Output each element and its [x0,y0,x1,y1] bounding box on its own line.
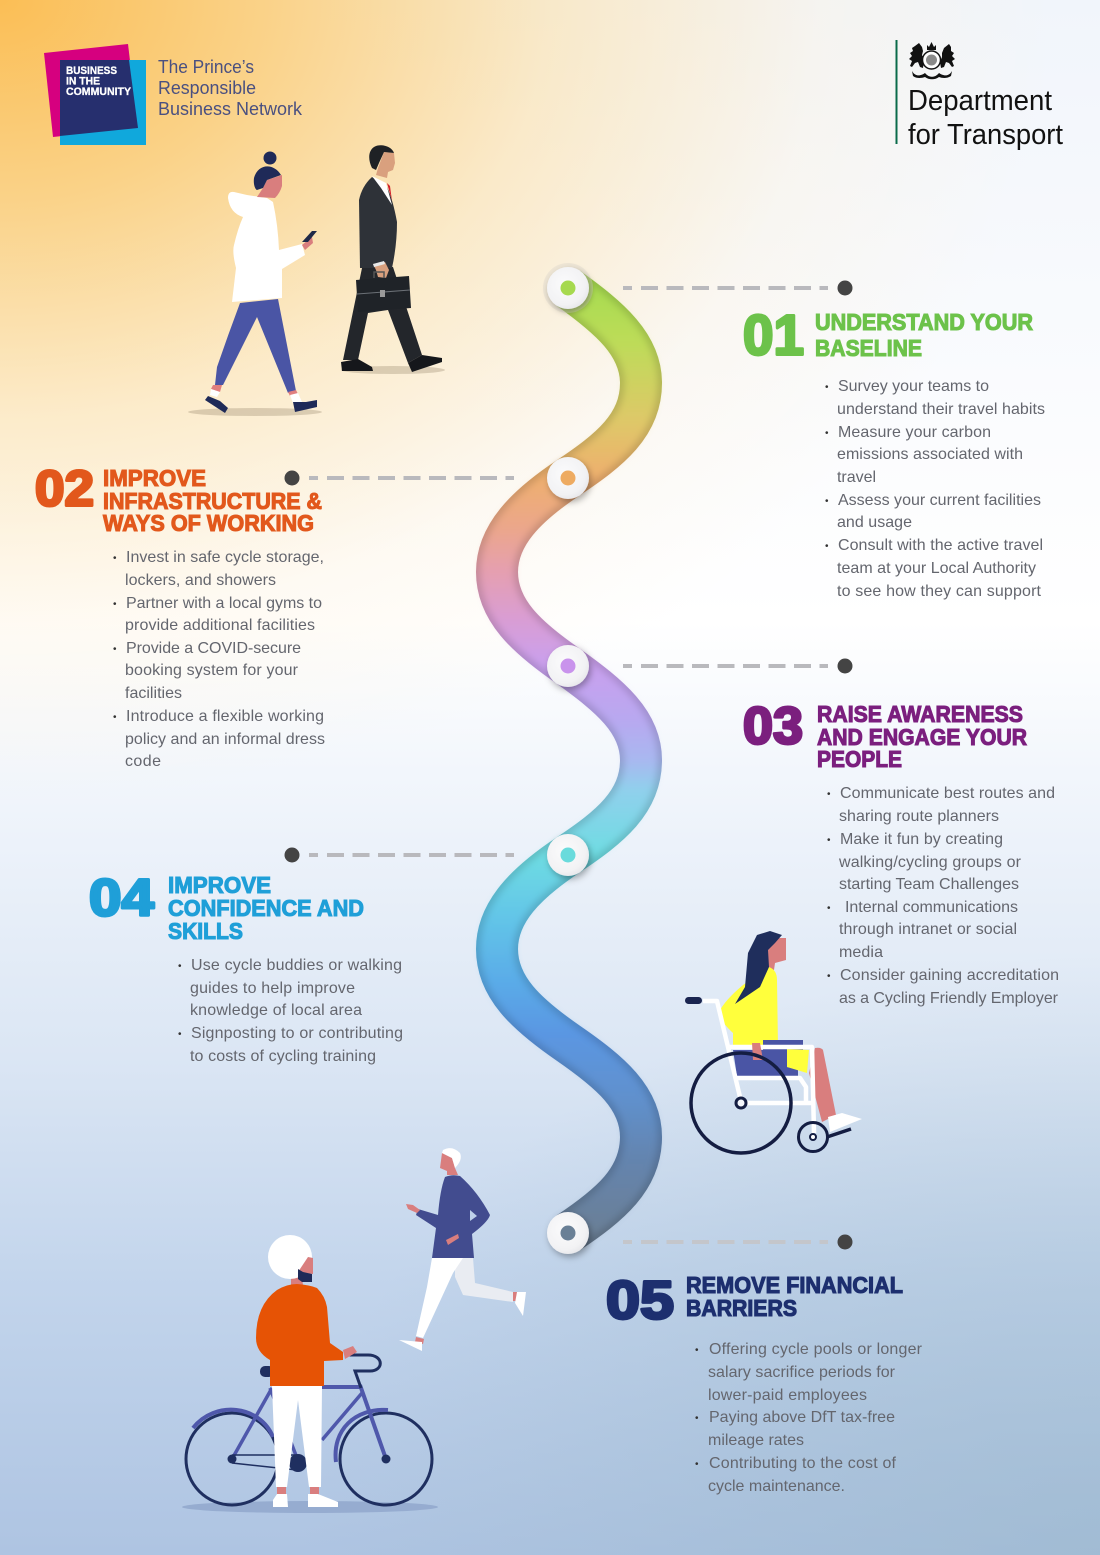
list 03: • [827,903,831,914]
text: The Prince's Responsible Business Network: The Prince’s [158,56,254,77]
connector: step 4 [284,848,514,862]
list 04: to costs of cycling training [190,1048,376,1065]
list 03 [827,785,1059,1007]
number 02: 02 [35,460,94,516]
heading 04: IMPROVE [168,872,271,898]
heading 01: BASELINE [815,335,922,361]
logo: Business in the Community: BUSINESS [66,65,117,77]
panel: step 01 [743,304,1045,600]
list 02: Introduce a flexible working [126,708,324,725]
list 05: • [695,1345,699,1356]
list 02: Partner with a local gyms to [126,595,322,612]
list 03: Internal communications [845,899,1018,916]
number 04: 04 [89,870,154,928]
list 05: • [695,1459,699,1470]
list 03: as a Cycling Friendly Employer [839,990,1059,1007]
list 02: • [113,644,117,655]
illustration: businessman with briefcase [341,145,445,374]
list 05: lower-paid employees [708,1387,867,1404]
number 03: 03 [743,698,803,756]
node: step 5 [547,1212,589,1254]
list 03: through intranet or social [839,921,1017,938]
logo: Department for Transport [896,40,1063,151]
list 01: Measure your carbon [838,424,991,441]
logo: Business in the Community: COMMUNITY [66,86,132,98]
list 04: guides to help improve [190,980,355,997]
list 02: lockers, and showers [125,572,276,589]
node: step 4 [547,834,589,876]
illustration: runner [399,1148,526,1351]
list 01: • [825,496,829,507]
list 02: • [113,599,117,610]
heading 02: INFRASTRUCTURE & [103,488,322,514]
list 02: code [125,753,161,770]
illustration: woman in wheelchair [685,931,862,1153]
list 03: starting Team Challenges [839,876,1019,893]
list 03: walking/cycling groups or [838,854,1022,871]
list 01: • [825,382,829,393]
list 02: Provide a COVID-secure [126,640,301,657]
list 05: salary sacrifice periods for [708,1364,896,1381]
panel: step 04 [89,870,403,1065]
heading 04: SKILLS [168,918,243,944]
heading 05: REMOVE FINANCIAL [686,1272,903,1298]
list 05: Offering cycle pools or longer [709,1341,923,1358]
illustration: man with bicycle [182,1235,438,1513]
list 05: mileage rates [708,1432,804,1449]
number 01: 01 [743,304,804,368]
list 01: travel [837,469,876,486]
rider [256,1235,357,1507]
list 04 [178,957,403,1065]
logo: Department for Transport: for Transport [908,119,1063,151]
bicycle [186,1355,432,1505]
list 05: cycle maintenance. [708,1478,845,1495]
list 05 [695,1341,923,1495]
heading 03: PEOPLE [817,746,902,772]
list 03: media [839,944,883,961]
list 01: emissions associated with [837,446,1023,463]
list 05: Contributing to the cost of [709,1455,897,1472]
heading 04: CONFIDENCE AND [168,895,364,921]
heading 03 [817,701,1027,772]
node: step 2 [547,457,589,499]
heading 02: WAYS OF WORKING [103,510,314,536]
heading 04 [168,872,364,944]
text: The Prince's Responsible Business Network [158,56,303,119]
list 02: Invest in safe cycle storage, [126,549,324,566]
list 01: understand their travel habits [837,401,1045,418]
logo: Business in the Community: IN THE [66,76,100,88]
node: step 3 [547,645,589,687]
panel: step 05 [606,1270,923,1495]
list 04: Signposting to or contributing [191,1025,403,1042]
list 02: • [113,553,117,564]
connector: step 3 [623,658,852,674]
list 01: Consult with the active travel [838,537,1043,554]
list 01: and usage [837,514,912,531]
list 01: to see how they can support [837,583,1042,600]
list 04: • [178,961,182,972]
number 05: 05 [606,1270,674,1330]
connector: step 2 [284,470,514,486]
heading 05: BARRIERS [686,1295,797,1321]
list 03: Consider gaining accreditation [840,967,1059,984]
list 03: • [827,835,831,846]
ribbon path [497,288,641,1233]
heading 02: IMPROVE [103,465,206,491]
list 01: • [825,428,829,439]
list 04: Use cycle buddies or walking [191,957,402,974]
list 05: Paying above DfT tax-free [709,1409,895,1426]
panel: step 02 [35,460,325,770]
connector: step 5 [623,1234,852,1250]
heading 03: AND ENGAGE YOUR [817,724,1027,750]
list 01: Assess your current facilities [838,492,1041,509]
node: step 1 [543,263,593,313]
list 02: booking system for your [125,662,299,679]
list 02: facilities [125,685,182,702]
connector: step 1 [623,280,852,296]
list 03: Communicate best routes and [840,785,1055,802]
panel: step 03 [743,698,1059,1007]
list 02 [113,549,325,770]
list 02: policy and an informal dress [125,731,325,748]
list 01: • [825,541,829,552]
list 03: • [827,971,831,982]
icon: royal crest [909,42,955,79]
logo: Department for Transport: Department [908,85,1052,117]
heading 05 [686,1272,903,1321]
list 05: • [695,1413,699,1424]
list 03: • [827,789,831,800]
heading 01 [815,309,1033,361]
heading 02 [103,465,322,536]
text: The Prince's Responsible Business Network: Responsible [158,77,256,98]
text: The Prince's Responsible Business Network: Business Network [158,98,303,119]
list 03: sharing route planners [839,808,999,825]
logo: Business in the Community [44,44,146,145]
list 04: knowledge of local area [190,1002,362,1019]
illustration: woman walking with phone [188,152,322,416]
list 01: Survey your teams to [838,378,989,395]
list 02: • [113,712,117,723]
list 02: provide additional facilities [125,617,315,634]
list 01: team at your Local Authority [837,560,1036,577]
list 04: • [178,1029,182,1040]
heading 01: UNDERSTAND YOUR [815,309,1033,335]
list 01 [825,378,1045,600]
list 03: Make it fun by creating [840,831,1003,848]
heading 03: RAISE AWARENESS [817,701,1023,727]
